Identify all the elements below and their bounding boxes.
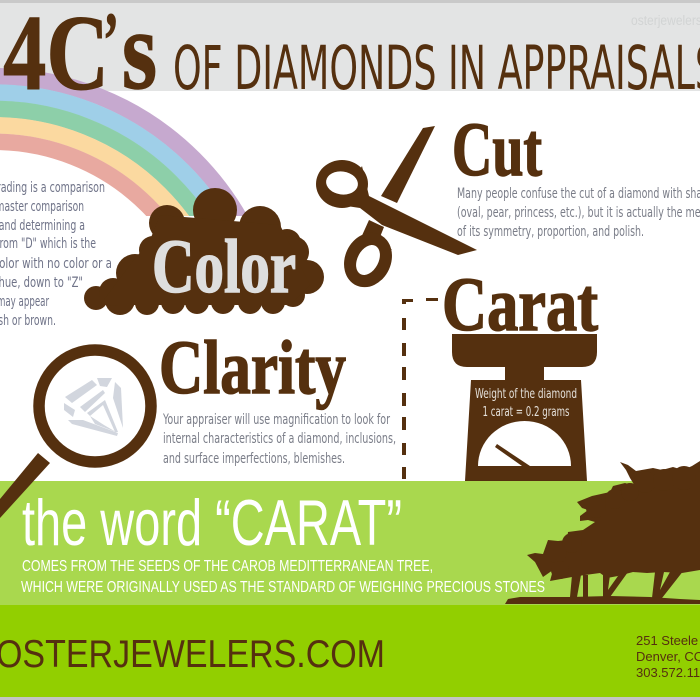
rainbow (0, 68, 246, 216)
carat fact text: WHICH WERE ORIGINALLY USED AS THE STANDARD OF WEIGHING PRECIOUS STONES (21, 579, 545, 596)
clarity heading: Clarity (159, 326, 346, 410)
carat heading: Carat (442, 263, 598, 347)
header band (0, 0, 700, 91)
scale text (475, 386, 577, 420)
icon: diamond (64, 378, 123, 436)
cut heading: Cut (452, 108, 542, 192)
cut description text (457, 186, 700, 240)
carat fact heading: the word “CARAT” (22, 486, 402, 559)
carat fact panel (0, 481, 700, 605)
clarity description text: and surface imperfections, blemishes. (163, 451, 345, 467)
title (3, 0, 700, 113)
scale text: 1 carat = 0.2 grams (482, 404, 570, 420)
icon: scale (452, 334, 597, 481)
cloud with color heading (84, 188, 324, 315)
clarity description text: internal characteristics of a diamond, inclusions, (163, 431, 396, 447)
dashed connector line (402, 298, 438, 479)
icon: magnifying glass (0, 350, 151, 518)
footer panel (0, 605, 700, 700)
clarity description text: Your appraiser will use magnification to look for (162, 412, 390, 428)
scale text: Weight of the diamond (475, 386, 577, 402)
carat fact text (21, 558, 545, 596)
clarity description text (162, 412, 396, 467)
website address: OSTERJEWELERS.COM (0, 633, 385, 676)
street address (636, 633, 700, 680)
color description text (0, 180, 112, 329)
carat fact text: COMES FROM THE SEEDS OF THE CAROB MEDITTERRANEAN TREE, (22, 558, 433, 575)
icon: scissors (316, 126, 477, 295)
icon: carob tree (505, 461, 700, 604)
color heading: Color (152, 225, 296, 309)
